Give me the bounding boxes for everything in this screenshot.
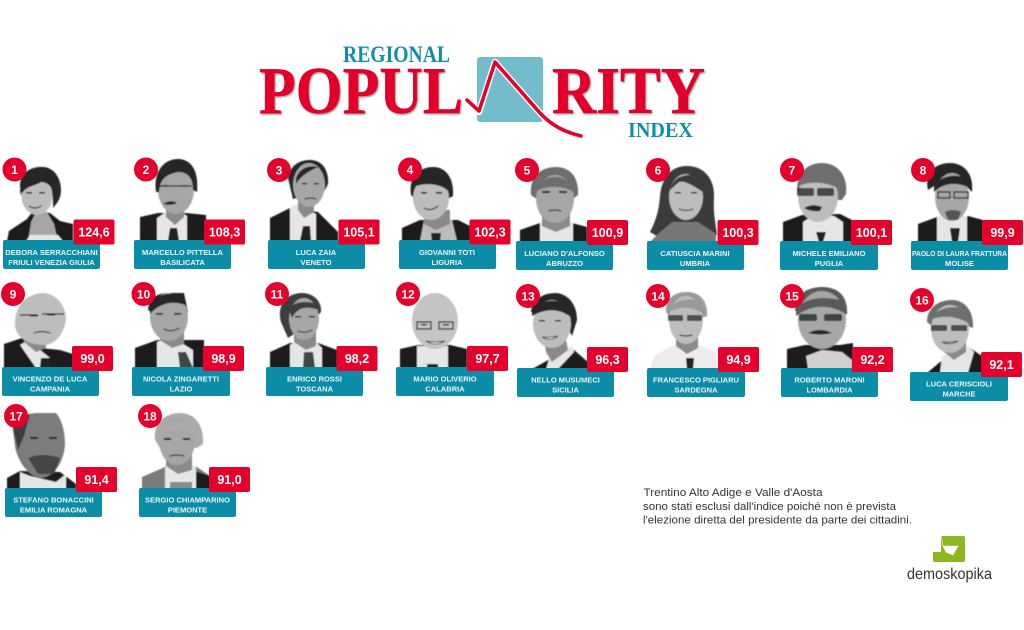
portrait 2: [140, 159, 206, 241]
logo square: [477, 57, 543, 122]
name label 4: [399, 240, 496, 269]
card 4: Giovanni Toti: LIGURIA: [431, 258, 463, 267]
card 17: Stefano Bonaccini: 91,4: [84, 473, 109, 487]
card 3: Luca Zaia: VENETO: [301, 258, 332, 267]
card 6: Catiuscia Marini: [646, 158, 758, 270]
name label 6: [647, 241, 744, 270]
card 7: Michele Emiliano: MICHELE EMILIANO: [793, 249, 866, 258]
rank badge 11: [265, 282, 289, 306]
card 9: Vincenzo De Luca: 9: [10, 288, 17, 302]
footnote text: Trentino Alto Adige e Valle d'Aosta: [644, 487, 823, 499]
name label 1: [3, 240, 100, 269]
footnote text: sono stati esclusi dall'indice poiché non è prevista: [643, 501, 897, 513]
card 6: Catiuscia Marini: CATIUSCIA MARINI: [660, 249, 730, 258]
footnote text: l'elezione diretta del presidente da parte dei cittadini.: [643, 514, 912, 526]
portrait 18: [142, 413, 210, 489]
card 11: Enrico Rossi: [265, 282, 378, 396]
rank badge 17: [4, 404, 28, 428]
card 9: Vincenzo De Luca: [1, 282, 113, 396]
rank badge 12: [396, 282, 420, 306]
card 1: Debora Serracchiani: FRIULI VENEZIA GIULIA: [8, 258, 95, 267]
card 7: Michele Emiliano: 100,1: [856, 226, 887, 240]
card 4: Giovanni Toti: [398, 158, 510, 269]
portrait 5: [520, 167, 587, 242]
score 2: [204, 220, 245, 244]
card 15: Roberto Maroni: [780, 284, 893, 397]
name label 10: [132, 367, 230, 396]
card 15: Roberto Maroni: 92,2: [860, 353, 885, 367]
name label 11: [266, 367, 363, 396]
rank badge 13: [516, 284, 540, 308]
card 2: Marcello Pittella: 108,3: [209, 226, 240, 240]
card 8: Paolo Di Laura Frattura: MOLISE: [945, 259, 974, 268]
card 1: Debora Serracchiani: [2, 158, 114, 269]
card 6: Catiuscia Marini: 100,3: [722, 226, 754, 240]
score 4: [470, 220, 510, 244]
card 11: Enrico Rossi: 98,2: [345, 352, 369, 366]
name label 17: [5, 488, 102, 517]
title: Regional Popularity Index logo: [259, 42, 705, 142]
card 16: Luca Ceriscioli: 92,1: [989, 358, 1014, 372]
card 15: Roberto Maroni: 15: [785, 290, 799, 304]
score 15: [852, 347, 893, 372]
card 13: Nello Musumeci: NELLO MUSUMECI: [531, 376, 600, 384]
rank badge 8: [911, 158, 935, 182]
card 8: Paolo Di Laura Frattura: 8: [920, 164, 927, 178]
rank badge 6: [646, 158, 670, 182]
portrait 12: [400, 293, 467, 368]
rank badge 7: [780, 158, 804, 182]
card 13: Nello Musumeci: [516, 284, 628, 397]
name label 2: [134, 240, 231, 269]
card 18: Sergio Chiamparino: 91,0: [217, 473, 242, 487]
card 9: Vincenzo De Luca: VINCENZO DE LUCA: [13, 374, 88, 384]
score 3: [338, 220, 380, 244]
card 12: Mario Oliverio: 12: [401, 288, 415, 302]
card 6: Catiuscia Marini: UMBRIA: [680, 259, 711, 268]
portrait 6: [650, 166, 717, 242]
card 14: Francesco Pigliaru: FRANCESCO PIGLIARU: [653, 376, 739, 384]
card 1: Debora Serracchiani: 124,6: [78, 226, 110, 240]
rank badge 1: [2, 158, 26, 182]
score 17: [76, 467, 117, 492]
footnote text: [643, 487, 912, 526]
card 7: Michele Emiliano: 7: [789, 164, 796, 178]
rank badge 16: [910, 288, 934, 312]
icon: green logo mark: [933, 536, 965, 562]
card 5: Luciano D'Alfonso: LUCIANO D'ALFONSO: [524, 249, 605, 258]
card 16: Luca Ceriscioli: MARCHE: [942, 390, 976, 398]
title word: REGIONAL: REGIONAL: [343, 42, 450, 67]
card 17: Stefano Bonaccini: EMILIA ROMAGNA: [20, 506, 88, 514]
name label 8: [911, 241, 1008, 270]
card 8: Paolo Di Laura Frattura: 99,9: [990, 226, 1015, 240]
card 16: Luca Ceriscioli: [910, 288, 1022, 401]
portrait 8: [918, 163, 983, 242]
card 3: Luca Zaia: 3: [276, 164, 283, 178]
title word: POPUL: POPUL: [259, 54, 463, 128]
trend line forming the letter A: [467, 62, 581, 136]
card 12: Mario Oliverio: 97,7: [475, 352, 500, 366]
card 18: Sergio Chiamparino: PIEMONTE: [168, 506, 207, 514]
card 5: Luciano D'Alfonso: 100,9: [592, 226, 623, 240]
title word: RITY: RITY: [552, 54, 705, 128]
card 11: Enrico Rossi: 11: [271, 288, 284, 302]
card 13: Nello Musumeci: 96,3: [595, 353, 620, 367]
card 3: Luca Zaia: LUCA ZAIA: [296, 248, 337, 257]
name label 7: [780, 241, 878, 270]
card 1: Debora Serracchiani: 1: [11, 163, 18, 177]
card 8: Paolo Di Laura Frattura: [911, 158, 1023, 270]
score 16: [981, 352, 1022, 377]
score 11: [336, 346, 378, 371]
card 7: Michele Emiliano: PUGLIA: [815, 259, 844, 268]
card 10: Nicola Zingaretti: 98,9: [211, 352, 236, 366]
portrait 9: [4, 293, 73, 368]
card 4: Giovanni Toti: 102,3: [474, 226, 506, 240]
card 15: Roberto Maroni: LOMBARDIA: [806, 386, 853, 394]
card 4: Giovanni Toti: 4: [407, 163, 414, 177]
card 10: Nicola Zingaretti: 10: [137, 288, 150, 302]
card 17: Stefano Bonaccini: [4, 404, 117, 517]
card 12: Mario Oliverio: MARIO OLIVERIO: [413, 374, 477, 384]
rank badge 2: [134, 158, 158, 182]
score 5: [587, 220, 628, 245]
portrait 4: [402, 167, 470, 241]
name label 3: [268, 240, 365, 269]
card 5: Luciano D'Alfonso: 5: [524, 164, 531, 178]
card 17: Stefano Bonaccini: STEFANO BONACCINI: [13, 496, 94, 504]
card 11: Enrico Rossi: ENRICO ROSSI: [287, 374, 342, 384]
logo wordmark: demoskopika: [907, 566, 992, 583]
portrait 10: [135, 293, 204, 368]
title word: INDEX: INDEX: [628, 118, 693, 142]
card 16: Luca Ceriscioli: LUCA CERISCIOLI: [926, 380, 992, 388]
rank badge 3: [267, 158, 291, 182]
name label 12: [396, 367, 494, 396]
portrait 16: [927, 300, 982, 373]
score 12: [467, 346, 508, 371]
name label 16: [910, 372, 1008, 401]
card 3: Luca Zaia: [267, 158, 380, 269]
score 10: [203, 346, 244, 371]
rank badge 15: [780, 284, 804, 308]
card 14: Francesco Pigliaru: SARDEGNA: [674, 386, 718, 394]
card 12: Mario Oliverio: CALABRIA: [425, 384, 465, 394]
name label 15: [781, 368, 878, 397]
portrait 3: [270, 160, 338, 241]
card 9: Vincenzo De Luca: 99,0: [80, 352, 105, 366]
card 18: Sergio Chiamparino: [138, 404, 250, 517]
card 2: Marcello Pittella: 2: [143, 163, 150, 177]
rank badge 4: [398, 158, 422, 182]
card 14: Francesco Pigliaru: [646, 284, 759, 397]
card 4: Giovanni Toti: GIOVANNI TOTI: [419, 248, 475, 257]
score 14: [718, 347, 759, 372]
portrait 11: [270, 293, 337, 368]
card 10: Nicola Zingaretti: LAZIO: [170, 384, 192, 394]
card 2: Marcello Pittella: BASILICATA: [160, 258, 205, 267]
score 8: [982, 220, 1023, 245]
card 10: Nicola Zingaretti: [132, 282, 244, 396]
card 5: Luciano D'Alfonso: [515, 158, 628, 270]
card 2: Marcello Pittella: MARCELLO PITTELLA: [142, 248, 224, 257]
score 18: [209, 467, 250, 492]
card 9: Vincenzo De Luca: CAMPANIA: [30, 384, 71, 394]
card 18: Sergio Chiamparino: SERGIO CHIAMPARINO: [145, 496, 230, 504]
card 14: Francesco Pigliaru: 94,9: [726, 353, 751, 367]
rank badge 5: [515, 158, 539, 182]
card 8: Paolo Di Laura Frattura: PAOLO DI LAURA FRATTURA: [912, 249, 1007, 258]
card 11: Enrico Rossi: TOSCANA: [296, 384, 334, 394]
score 6: [718, 220, 758, 245]
rank badge 9: [1, 282, 25, 306]
card 10: Nicola Zingaretti: NICOLA ZINGARETTI: [143, 374, 219, 384]
rank badge 10: [132, 282, 156, 306]
portrait 1: [7, 167, 73, 241]
card 14: Francesco Pigliaru: 14: [651, 290, 665, 304]
rank badge 14: [646, 284, 670, 308]
card 2: Marcello Pittella: [134, 158, 245, 269]
card 13: Nello Musumeci: SICILIA: [552, 386, 579, 394]
card 5: Luciano D'Alfonso: ABRUZZO: [546, 259, 583, 268]
portrait 14: [650, 292, 718, 369]
score 9: [72, 346, 113, 371]
portrait 13: [531, 293, 588, 369]
card 12: Mario Oliverio: [396, 282, 508, 396]
card 18: Sergio Chiamparino: 18: [143, 410, 157, 424]
name label 18: [139, 488, 236, 517]
card 6: Catiuscia Marini: 6: [655, 164, 662, 178]
card 13: Nello Musumeci: 13: [521, 290, 535, 304]
portrait 7: [783, 163, 852, 242]
demoskopika logo: [907, 536, 992, 583]
card 7: Michele Emiliano: [780, 158, 892, 270]
name label 13: [517, 368, 614, 397]
card 3: Luca Zaia: 105,1: [343, 226, 375, 240]
card 16: Luca Ceriscioli: 16: [915, 294, 929, 308]
name label 14: [647, 368, 745, 397]
card 1: Debora Serracchiani: DEBORA SERRACCHIANI: [5, 248, 98, 257]
score 1: [74, 220, 114, 244]
name label 9: [2, 367, 99, 396]
portrait 15: [787, 287, 853, 369]
score 7: [851, 220, 892, 245]
rank badge 18: [138, 404, 162, 428]
card 15: Roberto Maroni: ROBERTO MARONI: [794, 376, 865, 384]
name label 5: [516, 241, 613, 270]
score 13: [587, 347, 628, 372]
card 17: Stefano Bonaccini: 17: [9, 410, 23, 424]
portrait 17: [7, 413, 76, 489]
